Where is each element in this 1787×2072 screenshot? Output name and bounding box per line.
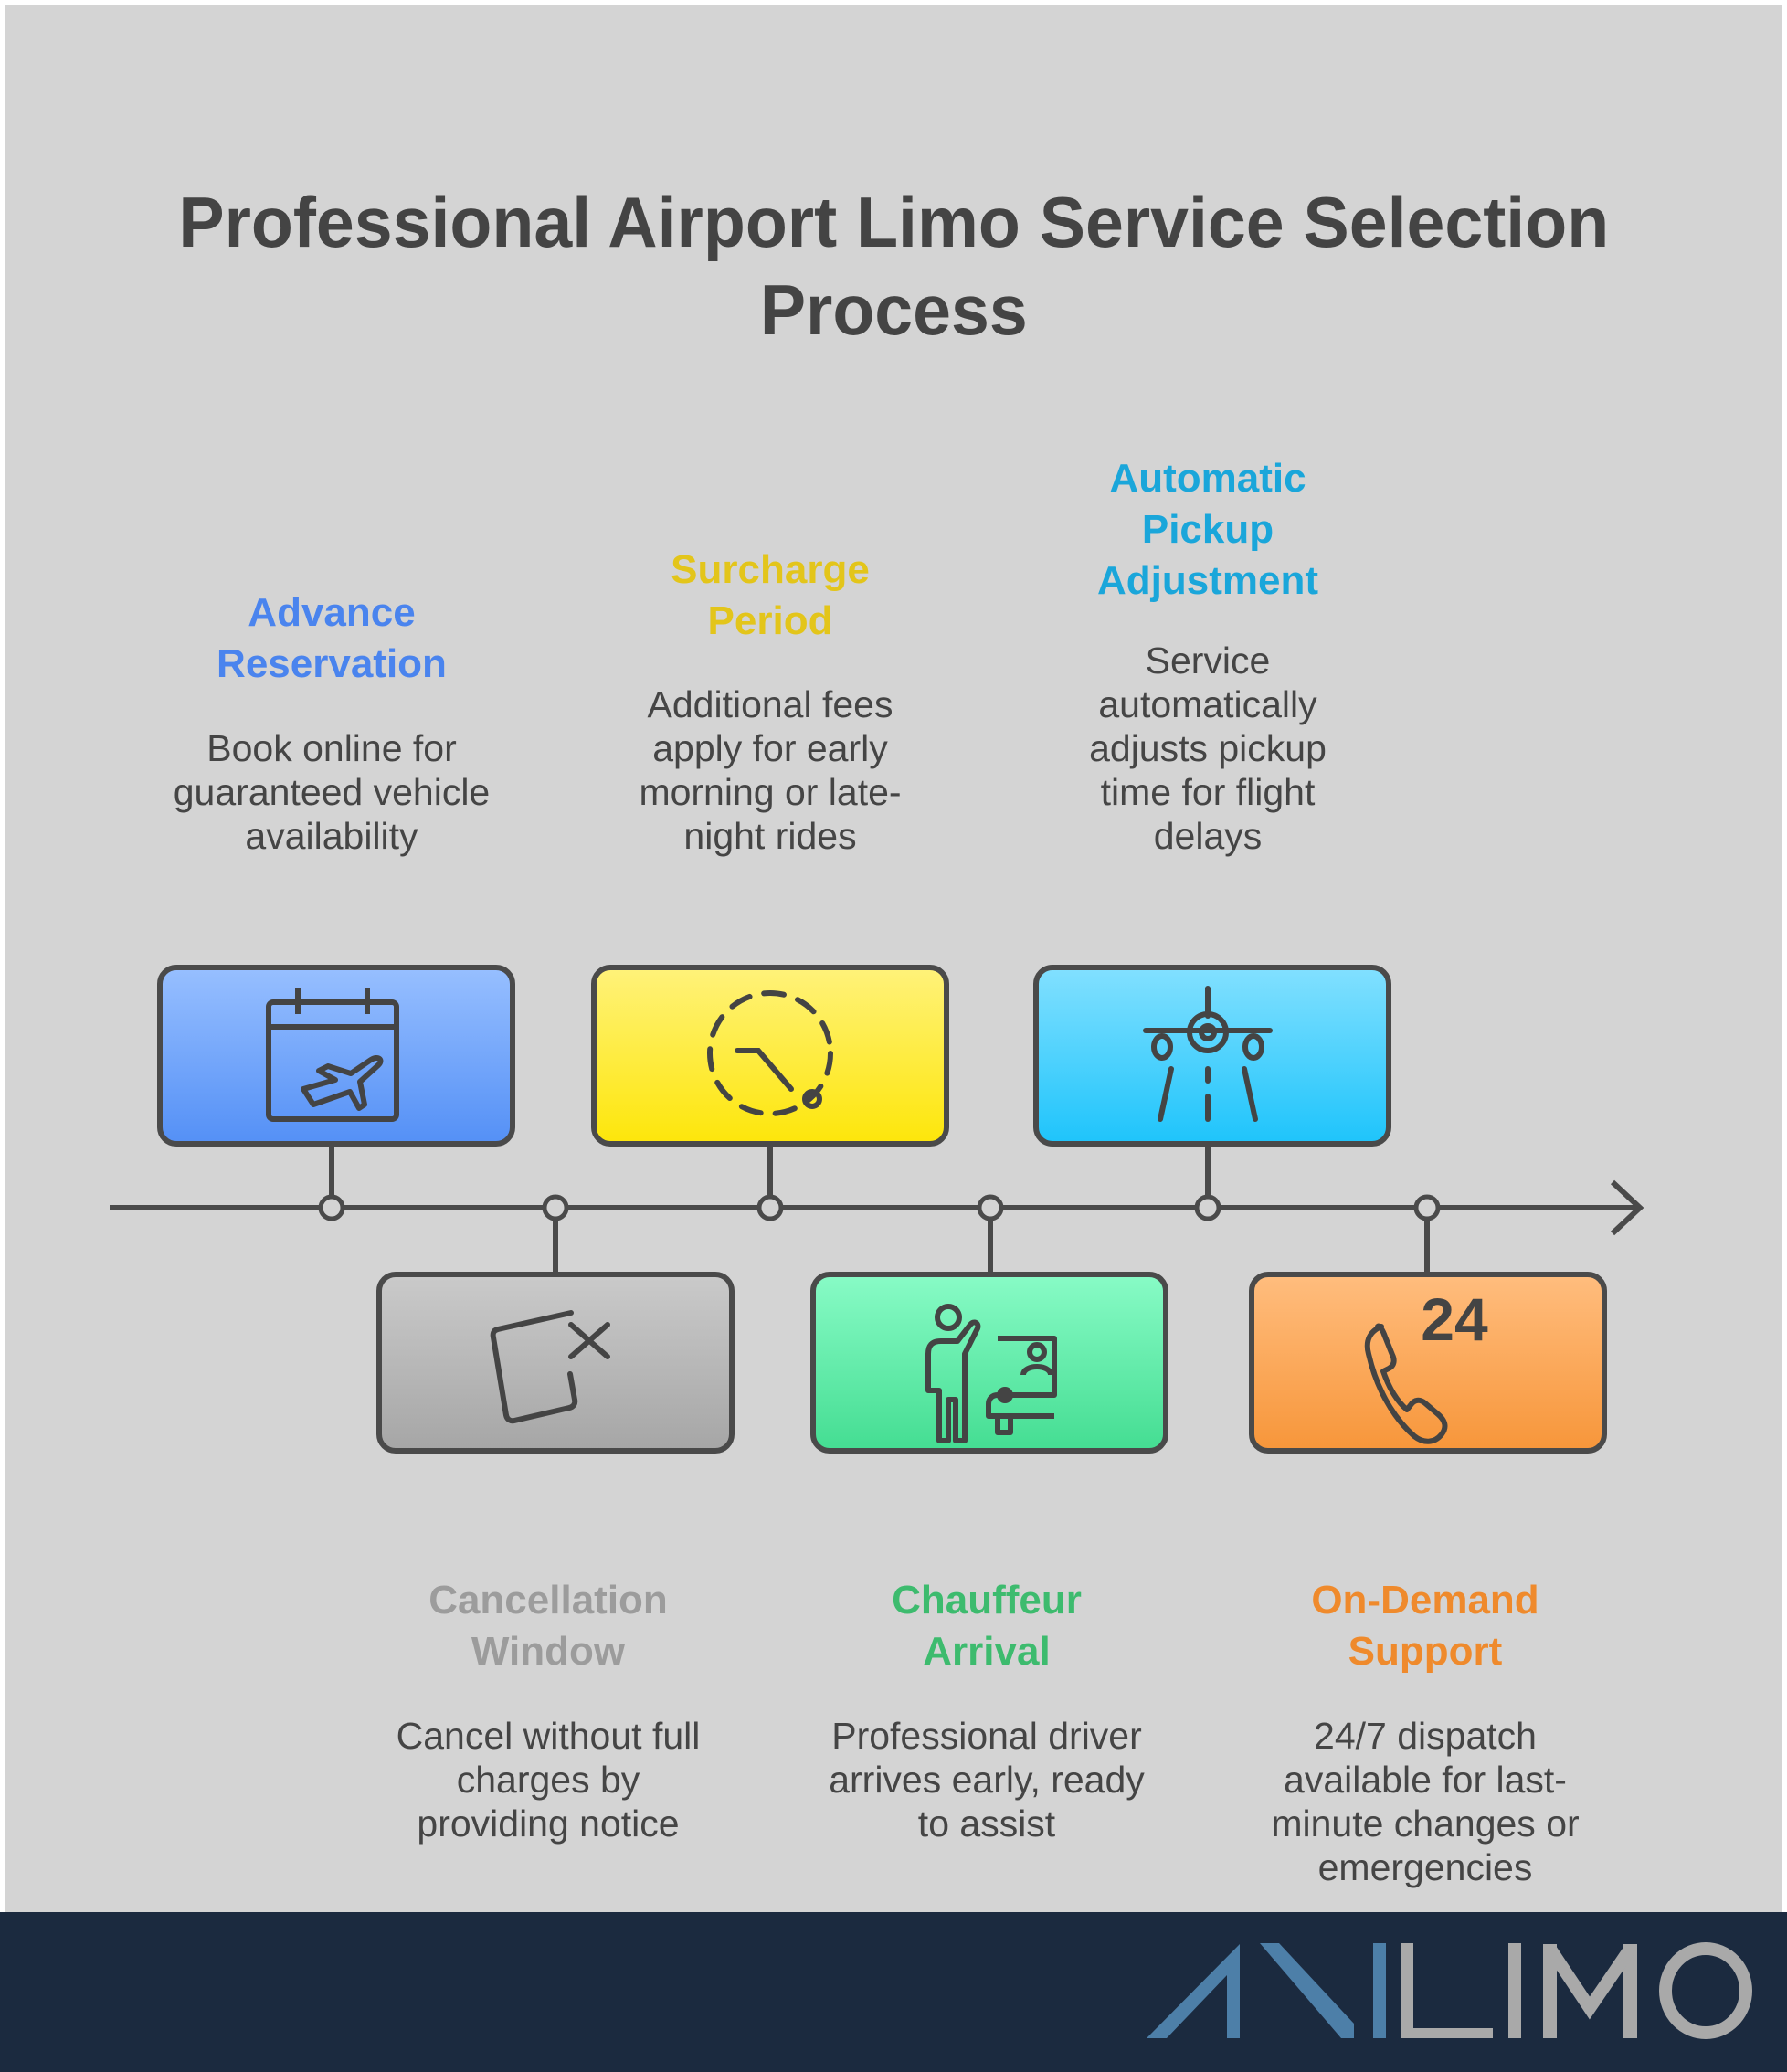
icon: chauffeur and car bbox=[928, 1306, 1054, 1441]
heading: advance reservation: Advance bbox=[248, 590, 416, 635]
text: surcharge bbox=[639, 683, 902, 857]
logo: ANILIMO bbox=[1147, 1942, 1752, 2039]
text: advance reservation: Book online for bbox=[206, 727, 457, 769]
heading: on-demand: On-Demand bbox=[1311, 1578, 1539, 1623]
footer bar bbox=[0, 1912, 1787, 2072]
title bbox=[178, 182, 1609, 350]
text: advance reservation bbox=[174, 727, 490, 857]
heading: automatic pickup: Pickup bbox=[1142, 507, 1274, 552]
text: automatic pickup: time for flight bbox=[1101, 771, 1315, 813]
heading: surcharge bbox=[671, 547, 870, 643]
icon: plane over runway bbox=[1146, 988, 1270, 1119]
text: surcharge: apply for early bbox=[652, 727, 888, 769]
text: on-demand: 24/7 dispatch bbox=[1314, 1715, 1537, 1757]
text: automatic pickup: delays bbox=[1154, 815, 1262, 857]
heading: surcharge: Surcharge bbox=[671, 547, 870, 592]
text: cancellation: providing notice bbox=[417, 1802, 680, 1845]
heading: automatic pickup: Adjustment bbox=[1097, 558, 1318, 603]
text: on-demand: available for last- bbox=[1284, 1759, 1567, 1801]
box: advance reservation bbox=[160, 967, 513, 1144]
icon: phone 24: 24 bbox=[1421, 1285, 1488, 1353]
text: automatic pickup: automatically bbox=[1098, 683, 1317, 725]
heading: cancellation bbox=[428, 1578, 668, 1674]
step: advance reservation bbox=[174, 590, 490, 857]
box: cancellation window bbox=[379, 1274, 732, 1451]
text: on-demand: emergencies bbox=[1318, 1846, 1532, 1888]
text: automatic pickup: Service bbox=[1146, 640, 1270, 682]
text: cancellation: charges by bbox=[457, 1759, 640, 1801]
timeline axis bbox=[110, 1145, 1640, 1274]
text: chauffeur bbox=[829, 1715, 1145, 1845]
text: on-demand bbox=[1271, 1715, 1580, 1888]
heading: on-demand bbox=[1311, 1578, 1539, 1674]
box: on-demand support bbox=[1252, 1274, 1604, 1451]
text: advance reservation: availability bbox=[245, 815, 418, 857]
heading: advance reservation: Reservation bbox=[217, 641, 447, 686]
box: automatic pickup bbox=[1036, 967, 1389, 1144]
title: Professional Airport Limo Service Selection bbox=[178, 182, 1609, 262]
heading: chauffeur: Arrival bbox=[923, 1629, 1051, 1674]
heading: chauffeur bbox=[892, 1578, 1082, 1674]
text: surcharge: Additional fees bbox=[648, 683, 893, 725]
icon: dashed clock bbox=[710, 993, 830, 1114]
text: on-demand: minute changes or bbox=[1271, 1802, 1580, 1845]
text: chauffeur: to assist bbox=[918, 1802, 1055, 1845]
text: surcharge: morning or late- bbox=[639, 771, 902, 813]
heading: chauffeur: Chauffeur bbox=[892, 1578, 1082, 1623]
icon: calendar with plane bbox=[269, 988, 397, 1119]
heading: automatic pickup bbox=[1097, 456, 1318, 603]
heading: cancellation: Cancellation bbox=[428, 1578, 668, 1623]
step: cancellation bbox=[397, 1578, 700, 1845]
heading: automatic pickup: Automatic bbox=[1109, 456, 1306, 501]
text: automatic pickup bbox=[1089, 640, 1327, 857]
icon: tilted square with x bbox=[493, 1313, 608, 1421]
text: cancellation bbox=[397, 1715, 700, 1845]
heading: cancellation: Window bbox=[471, 1629, 625, 1674]
step: chauffeur bbox=[829, 1578, 1145, 1845]
title: Process bbox=[760, 270, 1027, 350]
text: automatic pickup: adjusts pickup bbox=[1089, 727, 1327, 769]
box: chauffeur arrival bbox=[813, 1274, 1166, 1451]
text: chauffeur: Professional driver bbox=[831, 1715, 1142, 1757]
step: surcharge period bbox=[639, 547, 902, 857]
heading: on-demand: Support bbox=[1348, 1629, 1502, 1674]
icon: phone 24 bbox=[1368, 1285, 1488, 1442]
text: chauffeur: arrives early, ready bbox=[829, 1759, 1145, 1801]
heading: advance reservation bbox=[217, 590, 447, 686]
step: automatic pickup bbox=[1089, 456, 1327, 857]
text: advance reservation: guaranteed vehicle bbox=[174, 771, 490, 813]
heading: surcharge: Period bbox=[708, 598, 832, 643]
box: surcharge period bbox=[594, 967, 946, 1144]
text: cancellation: Cancel without full bbox=[397, 1715, 700, 1757]
step: on-demand bbox=[1271, 1578, 1580, 1888]
text: surcharge: night rides bbox=[683, 815, 857, 857]
